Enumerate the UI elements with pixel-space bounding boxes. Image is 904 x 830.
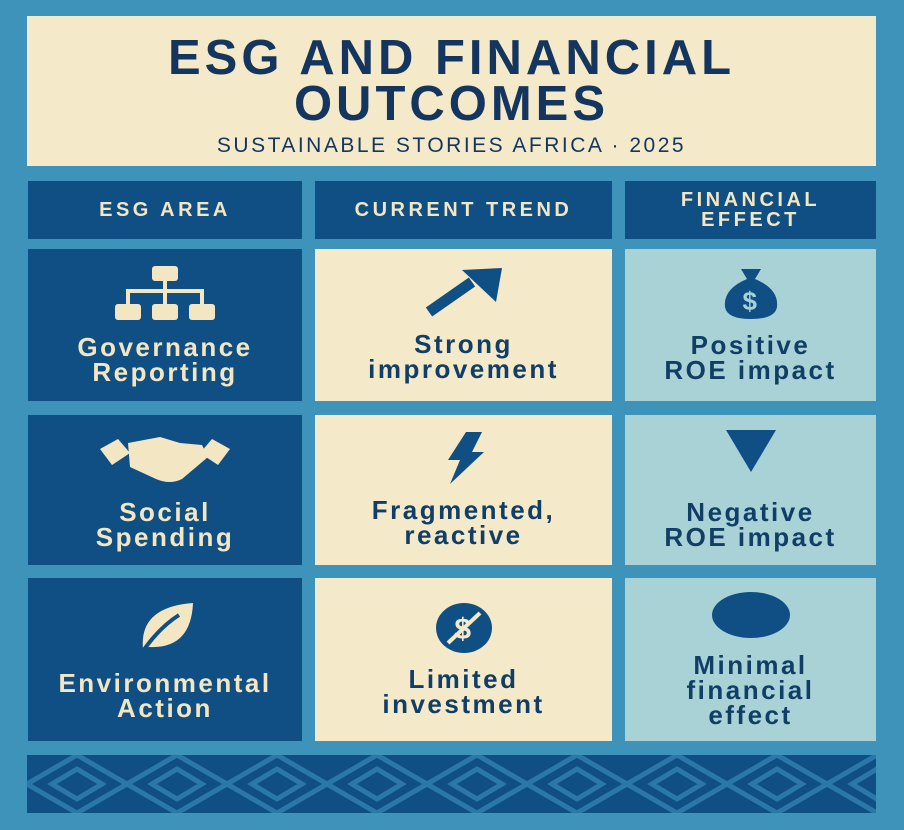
cell: fragmented reactive: Fragmented, xyxy=(372,495,555,525)
icon: no-money circle xyxy=(436,603,492,653)
icon: down triangle xyxy=(726,430,776,472)
header: financial effect: FINANCIAL xyxy=(681,189,820,211)
icon: leaf xyxy=(142,603,193,648)
cell: social spending xyxy=(28,415,302,565)
icon: lightning xyxy=(448,432,484,484)
cell: minimal effect: effect xyxy=(708,700,793,730)
cell: limited investment: Limited xyxy=(409,664,518,694)
icon: handshake xyxy=(100,437,230,482)
cell: strong improvement: improvement xyxy=(368,354,559,384)
cell: fragmented reactive xyxy=(315,415,612,565)
header: current trend: CURRENT TREND xyxy=(355,199,572,221)
cell: social spending: Spending xyxy=(96,522,234,552)
cell: positive ROE xyxy=(625,249,876,401)
icon: up arrow xyxy=(426,268,502,316)
cell: environmental action xyxy=(28,578,302,741)
cell: minimal effect: financial xyxy=(686,675,814,705)
cell: environmental action: Action xyxy=(117,692,213,722)
cell: negative ROE: ROE impact xyxy=(664,522,837,552)
cell: fragmented reactive: reactive xyxy=(404,520,523,550)
cell: governance reporting xyxy=(28,249,302,401)
icon: money bag xyxy=(724,269,778,319)
header: financial effect: EFFECT xyxy=(701,209,800,231)
cell: positive ROE: Positive xyxy=(691,330,810,360)
header: financial effect xyxy=(625,181,876,239)
header: current trend xyxy=(315,181,612,239)
subtitle: SUSTAINABLE STORIES AFRICA · 2025 xyxy=(217,134,686,157)
header: ESG area xyxy=(28,181,302,239)
cell: limited investment: investment xyxy=(382,688,545,718)
bottom pattern band xyxy=(27,755,876,813)
cell: governance reporting: Reporting xyxy=(92,356,238,386)
icon: circle xyxy=(712,592,790,638)
title xyxy=(168,31,735,131)
cell: governance reporting: Governance xyxy=(77,332,253,362)
icon: money bag: $ xyxy=(742,286,759,316)
icon: org chart xyxy=(115,266,215,320)
icon: no-money circle: $ xyxy=(454,612,473,646)
cell: negative ROE: Negative xyxy=(686,497,815,527)
cell: positive ROE: ROE impact xyxy=(664,355,837,385)
title: ESG AND FINANCIAL xyxy=(168,31,735,85)
title panel xyxy=(27,16,876,166)
title: OUTCOMES xyxy=(294,77,609,131)
cell: limited investment xyxy=(315,578,612,741)
cell: negative ROE xyxy=(625,415,876,565)
cell: environmental action: Environmental xyxy=(58,668,272,698)
cell: minimal effect xyxy=(625,578,876,741)
cell: minimal effect: Minimal xyxy=(693,650,808,680)
header: ESG area: ESG AREA xyxy=(99,199,231,221)
cell: social spending: Social xyxy=(119,496,211,526)
cell: strong improvement: Strong xyxy=(414,329,513,359)
cell: strong improvement xyxy=(315,249,612,401)
